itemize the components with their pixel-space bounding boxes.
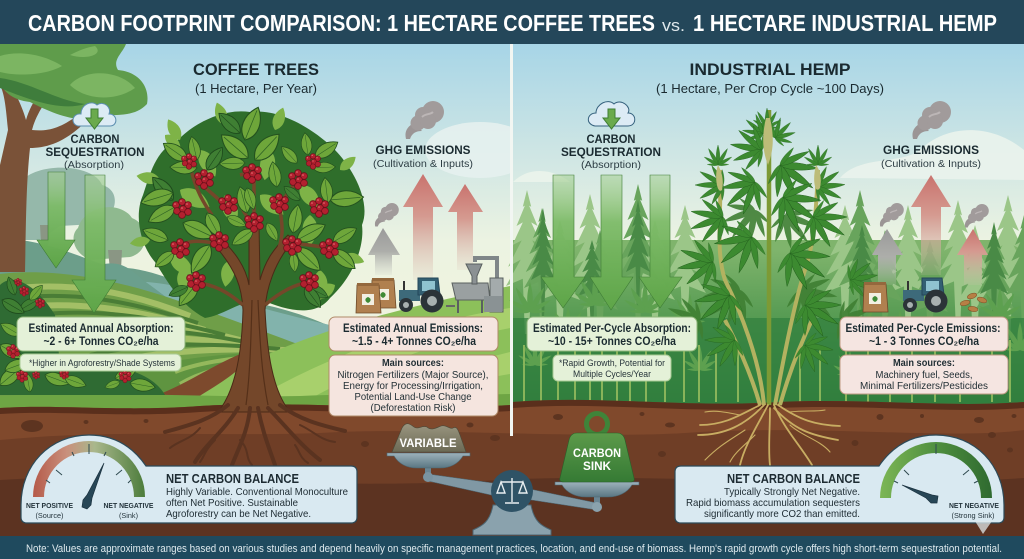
- weight: carbon sink: SINK: [583, 461, 612, 473]
- weight: variable: [392, 424, 466, 452]
- callout: rapid growth note: Multiple Cycles/Year: [573, 369, 651, 380]
- weight: carbon sink: CARBON: [573, 448, 621, 460]
- callout: annual absorption: ~2 - 6+ Tonnes CO₂e/ha: [44, 336, 159, 348]
- text: hemp net balance: NET CARBON BALANCE: [727, 472, 860, 486]
- callout: rapid growth note: *Rapid Growth, Potential for: [559, 358, 665, 369]
- coffee field rows: [0, 272, 300, 405]
- label: carbon sequestration hemp: CARBON: [586, 132, 636, 146]
- coffee roots: [165, 405, 345, 465]
- icon: cloud with down arrow (coffee): [73, 103, 116, 129]
- label: GHG emissions coffee: GHG EMISSIONS: [376, 143, 470, 157]
- text: coffee net balance: Highly Variable. Conventional Monoculture: [166, 486, 348, 498]
- label: GHG emissions hemp: (Cultivation & Inputs): [881, 158, 981, 170]
- icons: coffee inputs (bags, tractor, processor): [356, 258, 503, 313]
- label: GHG emissions hemp: GHG EMISSIONS: [883, 143, 979, 157]
- coffee tree: [129, 101, 366, 465]
- industrial hemp plant: [660, 108, 881, 465]
- callout: per-cycle absorption: Estimated Per-Cycle Absorption:: [533, 323, 691, 335]
- coffee tree trunk and branches: [182, 165, 328, 412]
- text: hemp net balance: Typically Strongly Net Negative.: [724, 486, 860, 498]
- callout: annual emissions: ~1.5 - 4+ Tonnes CO₂e/ha: [352, 336, 477, 348]
- text: hemp net balance: significantly more CO2 than emitted.: [704, 508, 860, 520]
- callout: rapid growth note: [553, 355, 671, 381]
- callout: annual emissions: Estimated Annual Emissions:: [343, 323, 483, 335]
- hemp roots: [698, 405, 840, 465]
- callout: annual absorption: [17, 317, 185, 351]
- panel: net carbon balance coffee: [21, 435, 357, 523]
- callout: hemp main sources: Minimal Fertilizers/Pesticides: [860, 381, 988, 392]
- left scale pan: [387, 453, 470, 468]
- callout: hemp main sources: [840, 355, 1008, 394]
- callout: per-cycle emissions: ~1 - 3 Tonnes CO₂e/ha: [869, 336, 980, 348]
- gauge: coffee: (Source): [36, 511, 64, 520]
- callout: per-cycle emissions: [840, 317, 1008, 351]
- callout: per-cycle absorption: [527, 317, 697, 351]
- text: coffee net balance: often Net Positive. Sustainable: [166, 497, 298, 509]
- heading: coffee trees: COFFEE TREES: [193, 60, 319, 79]
- title: vs.: [662, 16, 685, 35]
- ground soil: [0, 400, 1024, 536]
- text: hemp net balance: Rapid biomass accumulation sequesters: [686, 497, 860, 509]
- icons: smoke: [375, 101, 989, 228]
- icon: cloud with down arrow (hemp): [588, 102, 635, 129]
- callout: hemp main sources: Machinery fuel, Seeds,: [876, 370, 972, 381]
- arrows: coffee emissions: [368, 174, 483, 280]
- heading: industrial hemp: [656, 60, 884, 96]
- right scale pan: [555, 482, 639, 497]
- callout: coffee main sources: Nitrogen Fertilizers (Major Source),: [338, 370, 488, 381]
- coffee berries: [171, 153, 338, 291]
- label: carbon sequestration hemp: [561, 132, 661, 171]
- label: carbon sequestration hemp: SEQUESTRATION: [561, 145, 661, 159]
- gauge: coffee: NET POSITIVE: [26, 501, 73, 510]
- background forest tree: [0, 44, 148, 272]
- divider: [510, 44, 513, 436]
- weight: variable: VARIABLE: [400, 438, 457, 450]
- label: GHG emissions hemp: [881, 143, 981, 170]
- footer band: [0, 536, 1024, 559]
- arrows: hemp absorption: [541, 175, 682, 310]
- coffee foreground bushes: [0, 275, 165, 395]
- gauge: hemp: (Strong Sink): [952, 511, 995, 520]
- gauge: coffee: NET NEGATIVE: [104, 501, 154, 510]
- label: carbon sequestration coffee: [46, 132, 144, 171]
- panel: industrial hemp background: [506, 44, 1024, 406]
- callout: agroforestry note: [20, 354, 181, 371]
- panel: coffee trees background: [0, 44, 535, 412]
- callout: coffee main sources: Main sources:: [382, 358, 444, 369]
- label: carbon sequestration coffee: CARBON: [70, 132, 120, 146]
- callout: annual emissions: [329, 317, 498, 351]
- label: GHG emissions coffee: (Cultivation & Inputs): [373, 158, 473, 170]
- icon: scales of justice: [497, 478, 527, 503]
- label: carbon sequestration coffee: SEQUESTRATION: [46, 145, 144, 159]
- icons: hemp inputs (bag, tractor, seeds): [863, 278, 988, 312]
- callout: coffee main sources: [329, 355, 498, 416]
- label: carbon sequestration hemp: (Absorption): [581, 159, 641, 171]
- title: CARBON FOOTPRINT COMPARISON: 1 HECTARE COFFEE TREES: [28, 10, 655, 36]
- heading: coffee trees: [193, 60, 319, 96]
- weight: carbon sink: [560, 414, 634, 482]
- heading: coffee trees: (1 Hectare, Per Year): [195, 82, 317, 96]
- text: coffee net balance: Agroforestry can be Net Negative.: [166, 508, 311, 520]
- label: GHG emissions coffee: [373, 143, 473, 170]
- arrows: coffee absorption: [37, 172, 116, 313]
- text: hemp net balance: [686, 472, 860, 520]
- callout: agroforestry note: *Higher in Agroforestry/Shade Systems: [29, 358, 175, 369]
- callout: hemp main sources: Main sources:: [893, 358, 955, 369]
- balance scale: [387, 453, 639, 535]
- text: coffee net balance: NET CARBON BALANCE: [166, 472, 299, 486]
- label: carbon sequestration coffee: (Absorption): [64, 159, 124, 171]
- heading: industrial hemp: (1 Hectare, Per Crop Cycle ~100 Days): [656, 82, 884, 96]
- callout: coffee main sources: Energy for Processing/Irrigation,: [343, 381, 483, 392]
- callout: coffee main sources: Potential Land-Use Change: [354, 392, 472, 403]
- heading: industrial hemp: INDUSTRIAL HEMP: [690, 60, 850, 79]
- gauge: hemp: [886, 444, 999, 534]
- callout: per-cycle absorption: ~10 - 15+ Tonnes CO₂e/ha: [548, 336, 677, 348]
- arrows: hemp emissions: [872, 175, 988, 285]
- callout: annual absorption: Estimated Annual Absorption:: [28, 323, 174, 335]
- gauge: hemp: NET NEGATIVE: [949, 501, 999, 510]
- background hills: [0, 240, 330, 400]
- panel: net carbon balance hemp: [675, 435, 1004, 534]
- gauge: coffee: [26, 444, 154, 520]
- callout: coffee main sources: (Deforestation Risk): [370, 403, 456, 414]
- gauge: coffee: (Sink): [119, 511, 138, 520]
- callout: per-cycle emissions: Estimated Per-Cycle Emissions:: [846, 323, 1000, 335]
- header band: [0, 0, 1024, 44]
- right field hill: [178, 286, 510, 405]
- text: coffee net balance: [166, 472, 348, 520]
